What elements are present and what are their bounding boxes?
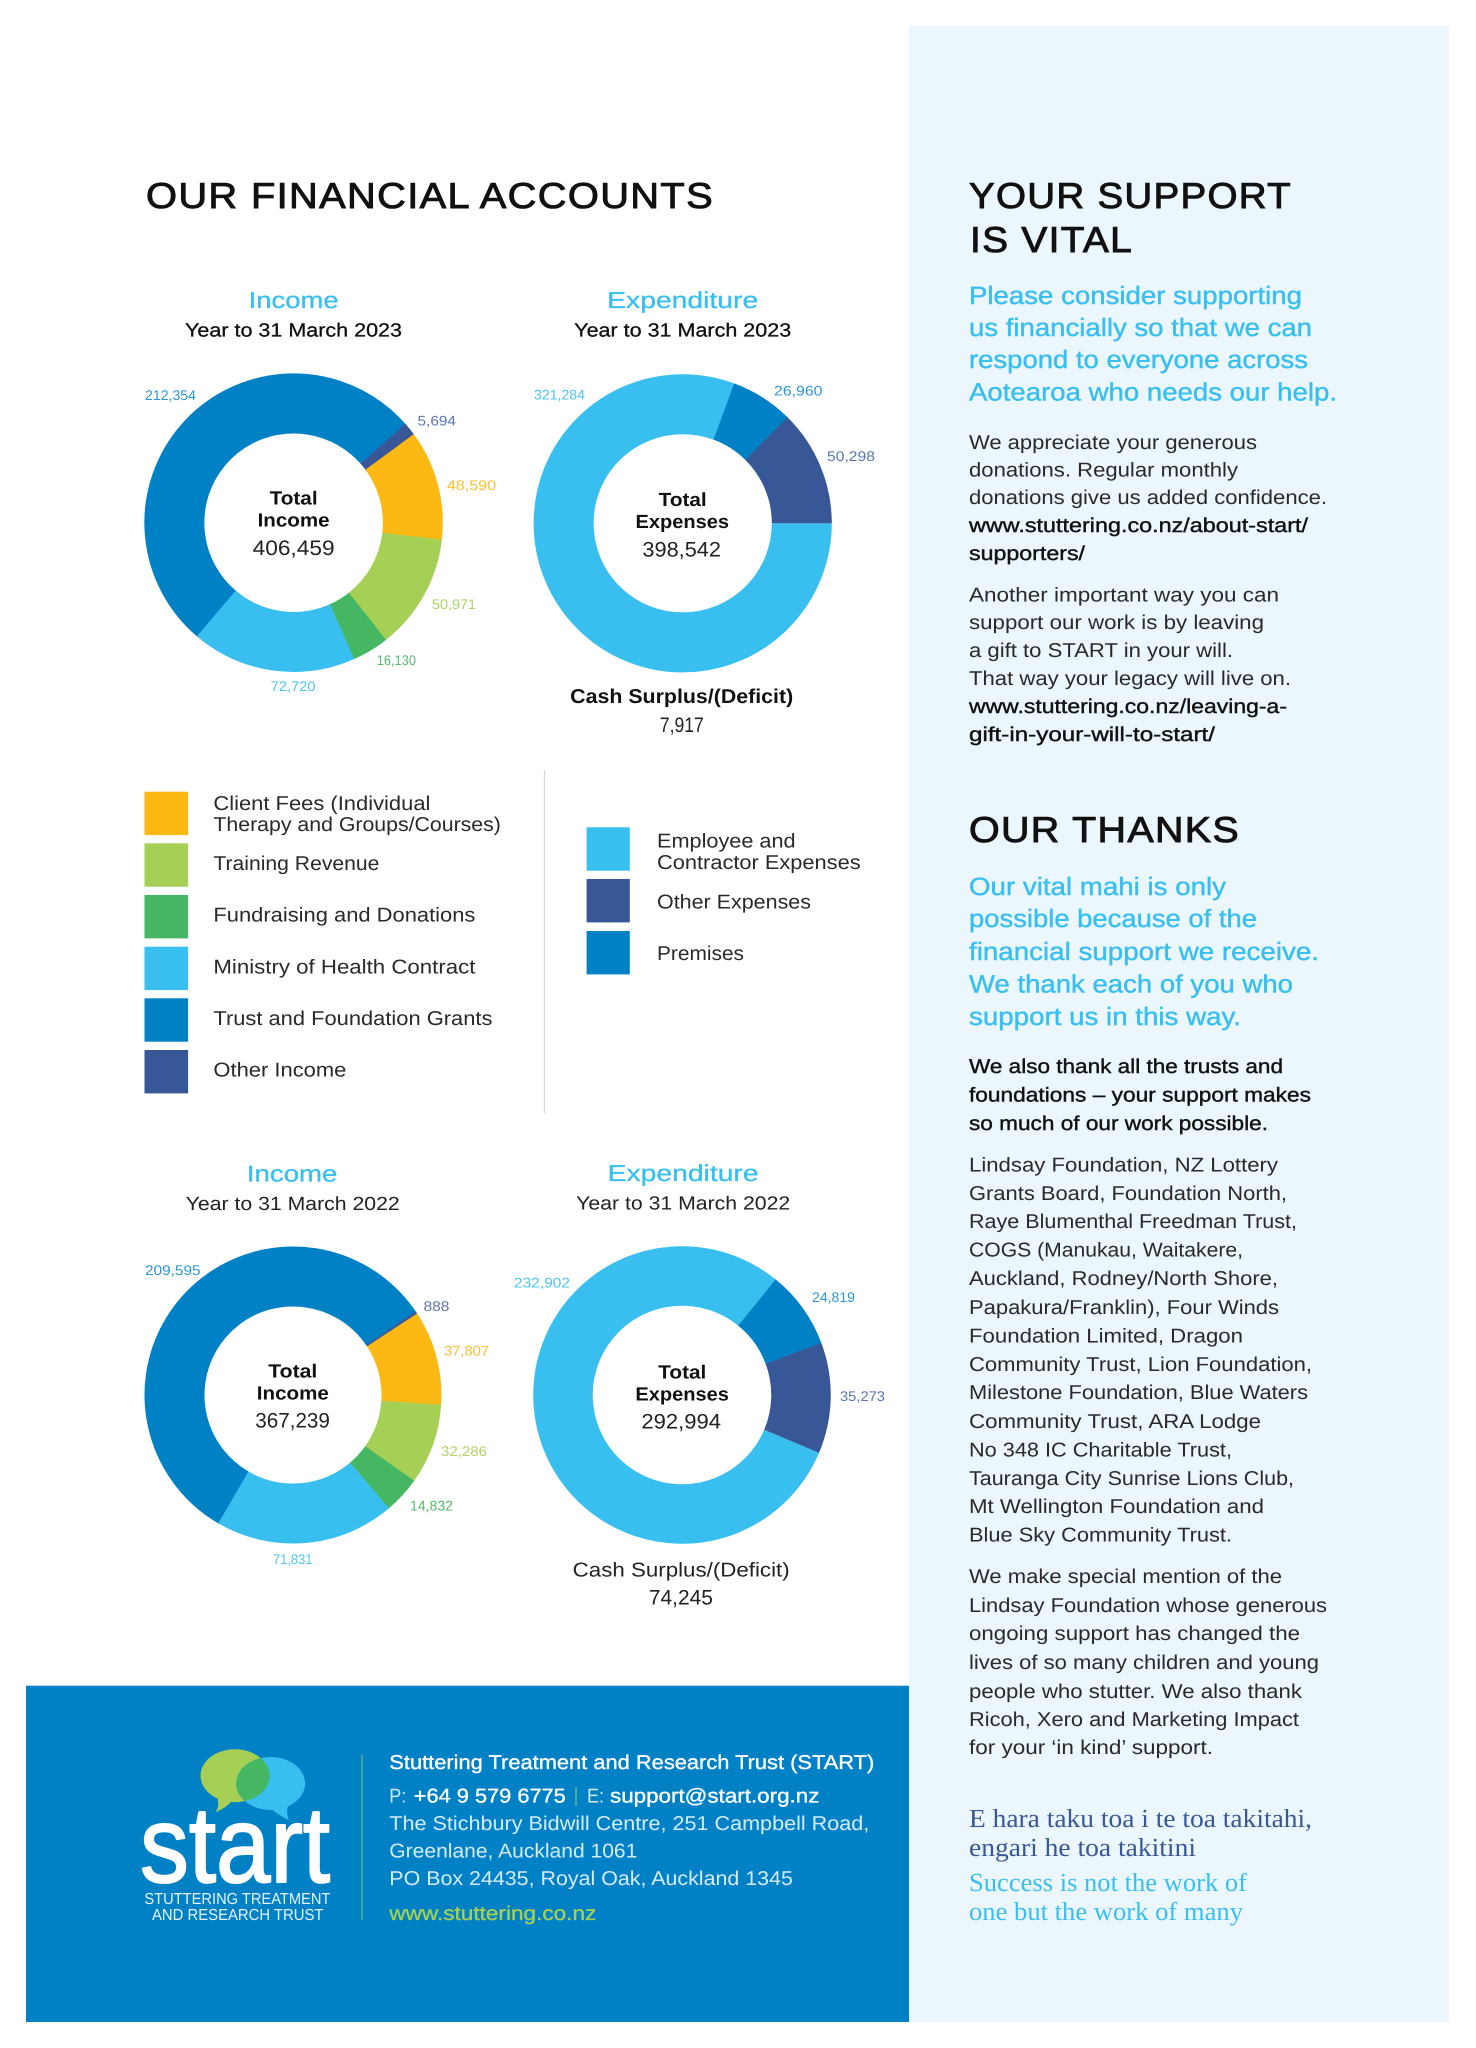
title: OUR FINANCIAL ACCOUNTS [146,175,714,216]
text block: list of funders: Auckland, Rodney/North Shore, [969,1268,1278,1290]
legend item: client fees: Therapy and Groups/Courses) [213,814,501,836]
donut labels: income 2022: 14,832 [410,1498,453,1514]
text block: thanks to trusts and foundations: foundations – your support makes [969,1085,1311,1107]
donut labels: income 2022 [145,1262,489,1567]
text block: list of funders [969,1155,1312,1547]
panel: support sidebar background [909,26,1449,2022]
callout: our vital mahi: support us in this way. [969,1003,1241,1031]
donut labels: income 2023 [145,387,496,694]
text block: gift in your will: gift-in-your-will-to-start/ [969,724,1216,746]
text block: list of funders: Lindsay Foundation, NZ Lottery [969,1155,1278,1177]
donut centre: total income 2023 [253,488,335,560]
legend item: employee and contractor expenses: Contractor Expenses [657,852,861,874]
text block: list of funders: Raye Blumenthal Freedman Trust, [969,1211,1297,1233]
text block: gift in your will: a gift to START in your will. [969,640,1233,662]
heading: income 2022: Income [247,1161,337,1187]
donut labels: income 2023: 16,130 [377,652,416,668]
legend item: ministry of health contract [144,947,476,990]
legend item: premises [587,931,744,974]
donut centre: total income 2022: 367,239 [255,1410,330,1433]
donut centre: total income 2023: 406,459 [253,537,335,560]
contact details: www.stuttering.co.nz [388,1903,596,1925]
panel: income 2023 [125,287,496,694]
callout: our vital mahi: financial support we receive. [969,938,1319,966]
text block: gift in your will: Another important way you can [969,585,1279,607]
legend item: premises: Premises [657,943,744,965]
cash surplus 2023: Cash Surplus/(Deficit) [570,686,793,708]
text block: special mention: lives of so many children and young [969,1652,1319,1674]
donut labels: expenditure 2022: 24,819 [812,1289,855,1305]
donut labels: income 2022: 888 [424,1298,450,1314]
logo: START speech bubbles [200,1749,305,1820]
text block: special mention: Lindsay Foundation whose generous [969,1595,1327,1617]
contact details: Stuttering Treatment and Research Trust (START) [389,1752,874,1774]
text block: thanks to trusts and foundations [969,1056,1311,1135]
donut labels: expenditure 2023: 50,298 [827,448,875,464]
callout: please consider supporting: Aotearoa who needs our help. [969,379,1337,407]
text block: special mention: Ricoh, Xero and Marketing Impact [969,1709,1299,1731]
donut labels: income 2023: 5,694 [418,413,456,429]
logo: tagline: STUTTERING TREATMENT [144,1891,331,1908]
text block: thanks to trusts and foundations: We also thank all the trusts and [969,1056,1283,1078]
callout: our vital mahi: possible because of the [969,905,1257,933]
quote: te reo proverb: E hara taku toa i te toa takitahi, [969,1804,1312,1833]
donut labels: expenditure 2022: 232,902 [514,1275,570,1291]
text block: special mention: for your ‘in kind’ support. [969,1737,1213,1759]
callout: please consider supporting: us financially so that we can [969,314,1312,342]
callout: please consider supporting: Please consider supporting [969,282,1302,310]
callout: our vital mahi [969,873,1319,1031]
legend item: training revenue: Training Revenue [213,853,379,875]
cash surplus 2022: Cash Surplus/(Deficit) [573,1560,790,1582]
text block: list of funders: Community Trust, ARA Lodge [969,1411,1261,1433]
quote: te reo proverb: engari he toa takitini [969,1833,1196,1862]
heading: income 2023: Income [249,287,339,313]
text block: gift in your will: That way your legacy will live on. [969,668,1291,690]
legend item: fundraising and donations: Fundraising and Donations [213,905,475,927]
donut labels: expenditure 2023: 321,284 [534,386,585,402]
donut labels: expenditure 2022 [514,1275,885,1404]
quote: english translation: one but the work of many [969,1897,1243,1926]
contact details: PO Box 24435, Royal Oak, Auckland 1345 [389,1868,793,1890]
legend item: other expenses [587,879,811,922]
donut centre: total expenses 2022: 292,994 [641,1411,721,1434]
panel: income 2022 [126,1161,489,1567]
contact details: support@start.org.nz [610,1786,819,1808]
text block: gift in your will: www.stuttering.co.nz/leaving-a- [968,696,1287,718]
donut centre: total income 2022: Income [257,1383,329,1404]
legend item: client fees [144,792,501,836]
legend item: fundraising and donations [144,895,475,938]
text block: donations [968,432,1327,565]
contact details: E: [587,1786,604,1808]
cash surplus 2023 [570,686,793,737]
legend item: other expenses: Other Expenses [657,891,811,913]
text block: special mention: We make special mention of the [969,1566,1282,1588]
donut labels: expenditure 2022: 35,273 [840,1388,885,1404]
heading: income 2022 [186,1161,400,1215]
legend item: client fees: Client Fees (Individual [213,793,430,815]
text block: donations: donations give us added confidence. [969,487,1327,509]
legend item: employee and contractor expenses: Employee and [657,830,796,852]
panel: expenditure 2023 [514,287,875,737]
donut labels: expenditure 2023: 26,960 [774,382,823,398]
donut labels: income 2022: 37,807 [444,1343,489,1359]
donut labels: income 2023: 72,720 [271,678,316,694]
donut labels: income 2023: 212,354 [145,387,196,403]
contact details: P: [389,1786,406,1808]
legend item: trust and foundation grants: Trust and Foundation Grants [213,1008,492,1030]
donut centre: total expenses 2022: Total [658,1362,706,1383]
donut centre: total expenses 2023: Total [659,490,707,511]
donut chart: expenditure 2023 [514,355,851,692]
heading: our thanks: OUR THANKS [969,809,1240,850]
heading: expenditure 2023: Expenditure [607,287,758,313]
text block: gift in your will: support our work is by leaving [969,612,1264,634]
heading: expenditure 2022: Year to 31 March 2022 [576,1193,790,1214]
heading: expenditure 2022: Expenditure [608,1160,759,1186]
panel: footer contact band [26,1686,909,2022]
contact details: +64 9 579 6775 [414,1786,566,1808]
legend: expense categories [587,827,861,974]
cash surplus 2022 [573,1560,790,1609]
text block: list of funders: Papakura/Franklin), Four Winds [969,1297,1279,1319]
text block: donations: donations. Regular monthly [969,460,1238,482]
contact details: Greenlane, Auckland 1061 [389,1841,637,1863]
donut centre: total income 2023: Total [270,488,318,509]
text block: list of funders: Mt Wellington Foundation and [969,1496,1264,1518]
legend item: ministry of health contract: Ministry of Health Contract [213,956,476,978]
cash surplus 2023: 7,917 [660,714,704,737]
heading: your support is vital: YOUR SUPPORT [969,175,1292,216]
text block: list of funders: Community Trust, Lion Foundation, [969,1354,1312,1376]
donut chart: expenditure 2022 [515,1228,849,1562]
text block: list of funders: Blue Sky Community Trust. [969,1525,1232,1547]
heading: income 2023: Year to 31 March 2023 [185,321,402,342]
donut labels: income 2022: 71,831 [273,1551,313,1567]
legend item: other income [144,1050,346,1093]
donut centre: total expenses 2022 [635,1362,729,1434]
text block: list of funders: Foundation Limited, Dragon [969,1326,1243,1348]
logo: start wordmark: start [140,1784,330,1905]
legend: income categories [144,792,501,1093]
contact details: The Stichbury Bidwill Centre, 251 Campbell Road, [389,1813,869,1835]
heading: income 2023 [185,287,402,342]
text block: list of funders: Grants Board, Foundation North, [969,1183,1287,1205]
heading: your support is vital: IS VITAL [970,219,1133,260]
donut labels: income 2023: 50,971 [432,596,476,612]
heading: income 2022: Year to 31 March 2022 [186,1194,400,1215]
contact details [388,1752,874,1925]
text block: list of funders: COGS (Manukau, Waitakere, [969,1240,1243,1262]
quote: english translation: Success is not the work of [969,1868,1247,1897]
logo: tagline [144,1891,331,1924]
text block: list of funders: Milestone Foundation, Blue Waters [969,1382,1308,1404]
text block: donations: www.stuttering.co.nz/about-start/ [968,515,1309,537]
text block: donations: supporters/ [969,543,1085,565]
donut labels: income 2023: 48,590 [447,477,496,493]
donut centre: total expenses 2022: Expenses [635,1385,729,1406]
donut chart: income 2023 [125,354,462,691]
legend item: trust and foundation grants [144,998,492,1042]
callout: our vital mahi: We thank each of you who [969,971,1293,999]
legend item: other income: Other Income [213,1060,346,1082]
text block: thanks to trusts and foundations: so much of our work possible. [969,1113,1268,1135]
donut labels: income 2022: 32,286 [441,1443,487,1459]
donut chart: income 2022 [126,1228,460,1562]
text block: list of funders: Tauranga City Sunrise Lions Club, [969,1468,1294,1490]
callout: our vital mahi: Our vital mahi is only [969,873,1227,901]
text block: donations: We appreciate your generous [969,432,1257,454]
text block: special mention: ongoing support has changed the [969,1623,1300,1645]
donut centre: total income 2023: Income [258,511,330,532]
text block: list of funders: No 348 IC Charitable Trust, [969,1440,1232,1462]
donut centre: total income 2022 [255,1361,330,1433]
text block: special mention: people who stutter. We also thank [969,1681,1303,1703]
donut centre: total expenses 2023: 398,542 [642,539,721,562]
heading: your support is vital [969,175,1292,260]
donut centre: total income 2022: Total [268,1361,317,1382]
donut centre: total expenses 2023: Expenses [636,512,729,533]
donut centre: total expenses 2023 [636,490,729,562]
donut labels: income 2022: 209,595 [145,1262,201,1278]
heading: expenditure 2022 [576,1160,790,1214]
donut labels: expenditure 2023 [534,382,875,464]
legend item: employee and contractor expenses [587,827,861,874]
callout: please consider supporting [969,282,1337,407]
legend item: training revenue [144,843,379,887]
quote: te reo proverb [969,1804,1312,1862]
callout: please consider supporting: respond to everyone across [969,346,1308,374]
text block: special mention [969,1566,1327,1759]
heading: expenditure 2023 [574,287,791,342]
logo: tagline: AND RESEARCH TRUST [152,1907,324,1924]
quote: english translation [969,1868,1247,1926]
text block: gift in your will [968,585,1291,746]
heading: expenditure 2023: Year to 31 March 2023 [574,321,791,342]
panel: expenditure 2022 [514,1160,885,1609]
cash surplus 2022: 74,245 [649,1586,713,1609]
